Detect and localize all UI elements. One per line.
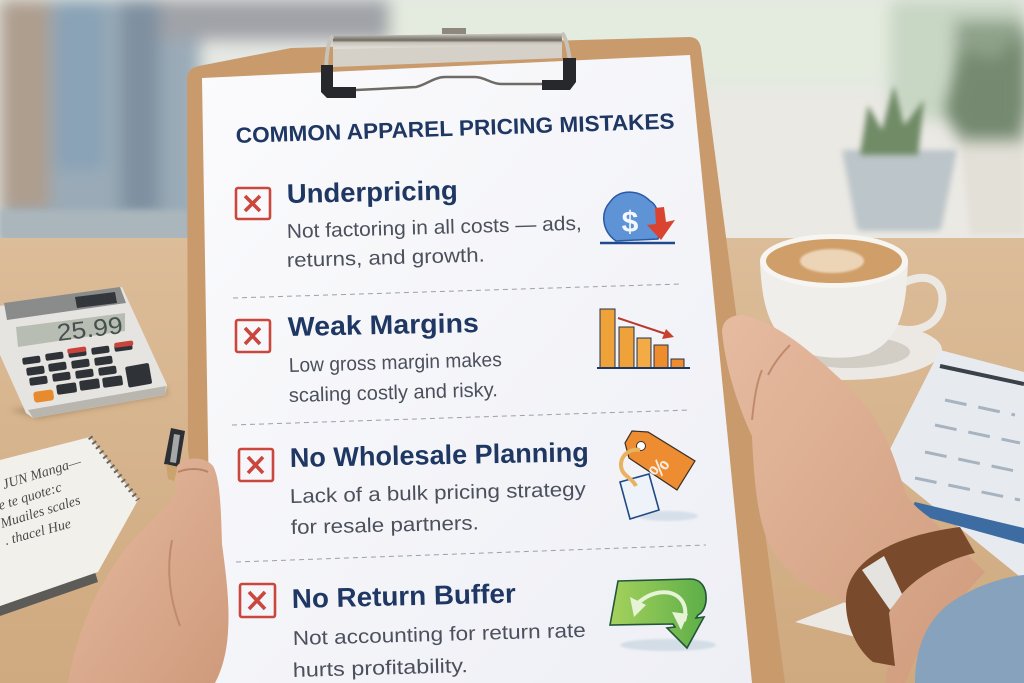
description: Not factoring in all costs — ads,: [287, 213, 582, 243]
description: [289, 349, 502, 407]
clipboard board: [187, 37, 785, 683]
icon: red x box: [239, 449, 273, 481]
handwriting: JUN Manga—: [1, 455, 83, 493]
description: hurts profitability.: [293, 655, 468, 682]
background: plants and pots: [842, 30, 1024, 235]
description: [290, 479, 586, 539]
paper sheet: [202, 55, 752, 683]
icon: red x box: [236, 188, 270, 219]
watch: [846, 527, 975, 666]
handwriting: [0, 455, 83, 549]
heading: Underpricing: [286, 175, 458, 209]
clip: [321, 28, 576, 98]
handwriting: Muailes scales: [0, 493, 83, 532]
divider: [233, 284, 680, 298]
left hand: [68, 458, 229, 683]
divider: [236, 545, 706, 562]
description: returns, and growth.: [287, 244, 485, 272]
right hand: [722, 315, 1024, 683]
icon: red x box: [240, 584, 275, 617]
icon: green return arrow: [610, 579, 716, 651]
item: No Wholesale Planning: [239, 431, 698, 539]
pen: [164, 428, 185, 481]
description: for resale partners.: [291, 512, 479, 539]
description: [293, 620, 586, 682]
heading: Weak Margins: [287, 308, 479, 342]
icon: price tag: [620, 431, 698, 521]
calculator display: 25.99: [55, 312, 124, 347]
document on table: [795, 350, 1024, 638]
description: Lack of a bulk pricing strategy: [290, 479, 586, 508]
icon: falling bar chart: [597, 309, 690, 368]
item: Underpricing: [236, 175, 675, 272]
calculator: [0, 287, 168, 419]
description: Not accounting for return rate: [293, 620, 586, 650]
calculator keys: [22, 342, 152, 395]
icon: price tag: %: [645, 454, 675, 483]
handwriting: . thacel Hue: [3, 517, 73, 549]
background: room: [0, 0, 1024, 245]
title: COMMON APPAREL PRICING MISTAKES: [235, 108, 675, 148]
description: Low gross margin makes: [289, 349, 502, 377]
icon: falling dollar: [600, 192, 675, 243]
shirt sleeve: [915, 575, 1024, 683]
description: [287, 213, 582, 272]
icon: red x box: [236, 320, 270, 352]
table top: [0, 238, 1024, 683]
icon: falling dollar: $: [622, 206, 639, 239]
divider: [232, 410, 690, 425]
heading: No Return Buffer: [291, 579, 517, 614]
heading: No Wholesale Planning: [290, 437, 589, 473]
notebook: [0, 437, 138, 616]
description: scaling costly and risky.: [289, 379, 498, 407]
item: No Return Buffer: [240, 579, 716, 682]
coffee cup and saucer: [748, 234, 942, 380]
item: Weak Margins: [236, 308, 690, 407]
